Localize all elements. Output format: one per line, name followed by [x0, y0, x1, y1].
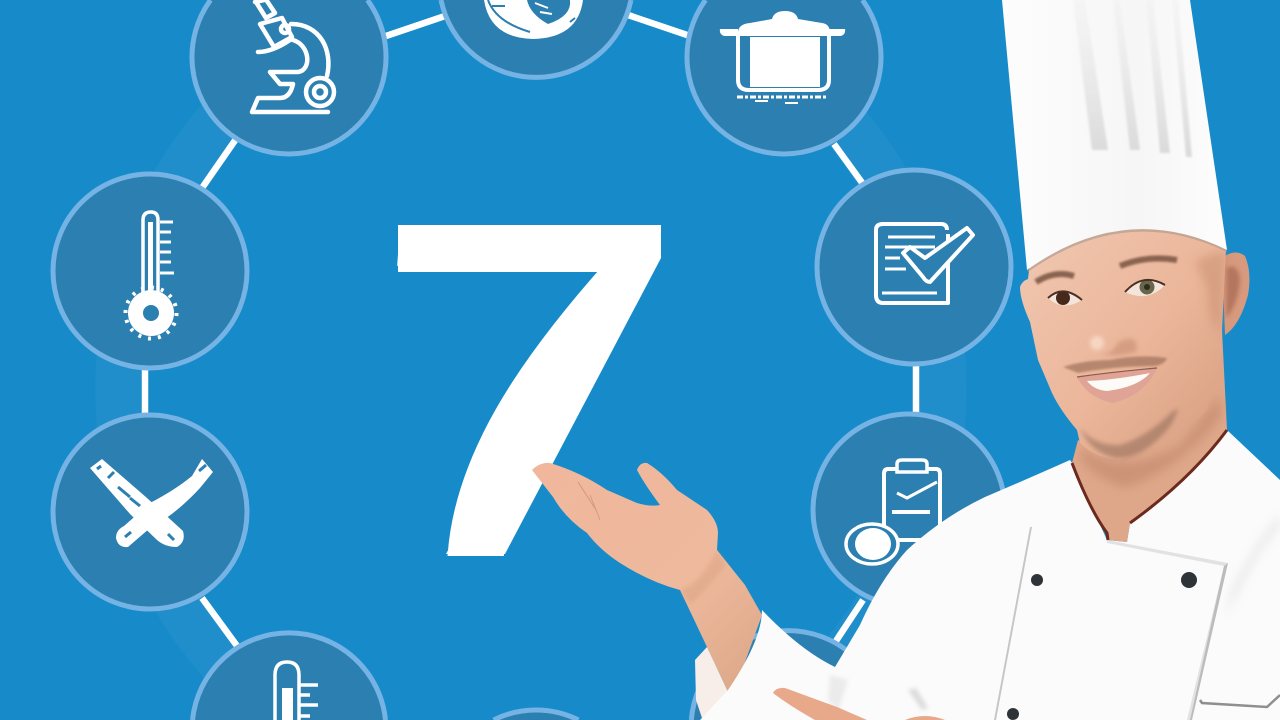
icon circle: thermometer: [53, 174, 247, 368]
jacket button: [1007, 708, 1019, 720]
icon circle: bottom: [494, 710, 578, 720]
chef lower hand: [773, 688, 945, 720]
icon circle: clipboard and egg: [813, 414, 1005, 606]
chef inner cuff: [695, 647, 728, 718]
moustache: [1063, 356, 1167, 373]
icon circle: cooking pot: [687, 0, 881, 154]
chef sleeve and jacket: [700, 430, 1280, 720]
eyebrows: [1036, 258, 1177, 282]
icon circle: checklist: [817, 170, 1011, 364]
white ring segments: [145, 15, 916, 650]
icon circle: crossed knives: [53, 415, 247, 609]
icon circle: bottom right: [691, 631, 885, 720]
nose shadow: [1100, 339, 1137, 356]
chef face: [1020, 217, 1226, 460]
icon circle: microscope: [192, 0, 386, 154]
icon circle: top dish: [441, 0, 631, 77]
jacket pocket: [1200, 695, 1280, 707]
chef hat: [1002, 0, 1227, 272]
jacket button: [1031, 574, 1043, 586]
nose highlight: [1090, 336, 1104, 350]
right eye: [1125, 280, 1165, 296]
jacket button: [1181, 572, 1197, 588]
left eye: [1048, 291, 1082, 306]
chef: [532, 0, 1280, 720]
chef raised hand and arm: [532, 463, 762, 692]
big number 7: 7: [343, 127, 693, 655]
icon circle: bottom left thermometer: [192, 633, 386, 720]
chef ear: [1222, 252, 1249, 335]
chef neck: [1072, 330, 1227, 542]
faint outer ring: [120, 100, 942, 680]
mouth: [1077, 368, 1157, 403]
stubble: [1080, 408, 1178, 458]
